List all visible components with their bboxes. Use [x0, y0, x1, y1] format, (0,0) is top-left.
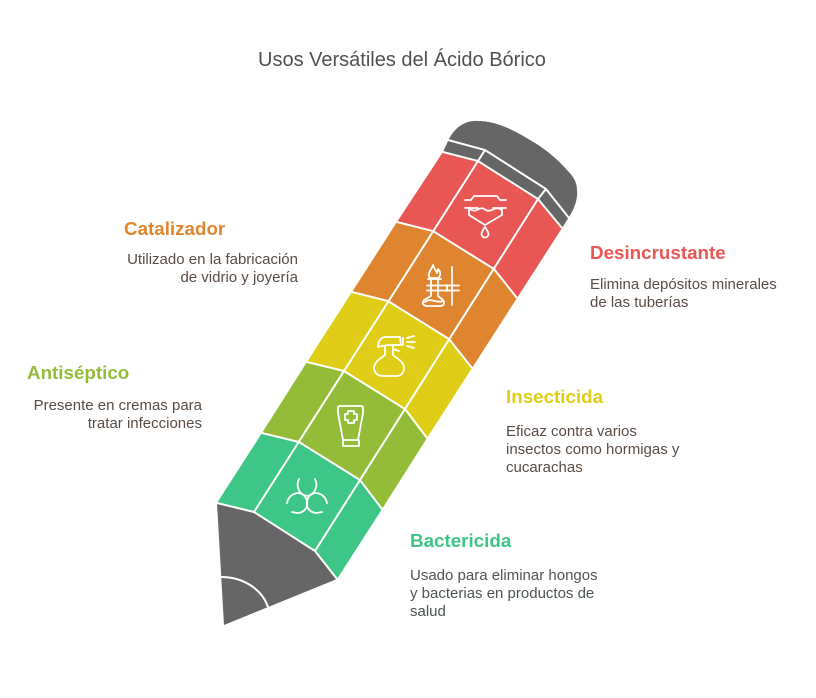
- description: bactericida: y bacterias en productos de: [410, 585, 594, 602]
- icon: biohazard: [287, 479, 327, 513]
- pencil tip: [217, 503, 337, 625]
- text block: bactericida: [410, 530, 598, 620]
- description: bactericida: [410, 567, 598, 620]
- description: insecticida: insectos como hormigas y: [506, 441, 679, 458]
- description: desincrustante: [590, 276, 777, 311]
- text block: insecticida: [506, 386, 680, 476]
- description: insecticida: Eficaz contra varios: [506, 423, 637, 440]
- title: Usos Versátiles del Ácido Bórico: [258, 49, 546, 71]
- segment dividers: [217, 152, 562, 579]
- pencil eraser: [443, 121, 577, 228]
- icon: flask and burner: [423, 265, 459, 306]
- description: antiséptico: tratar infecciones: [88, 415, 202, 432]
- heading: antiséptico: Antiséptico: [27, 362, 129, 383]
- segment: desincrustante: [397, 152, 562, 298]
- icon: spray bottle: [374, 336, 415, 376]
- description: insecticida: cucarachas: [506, 459, 583, 476]
- segment: antiséptico: [262, 362, 427, 509]
- description: catalizador: Utilizado en la fabricación: [127, 251, 298, 268]
- text block: antiséptico: [27, 362, 202, 432]
- segment: bactericida: [217, 433, 382, 579]
- icon: pipe with drop: [465, 196, 506, 238]
- heading: catalizador: Catalizador: [124, 218, 225, 239]
- description: bactericida: Usado para eliminar hongos: [410, 567, 598, 584]
- description: catalizador: [127, 251, 298, 286]
- description: desincrustante: de las tuberías: [590, 294, 688, 311]
- segment: insecticida: [307, 292, 472, 438]
- heading: insecticida: Insecticida: [506, 386, 603, 407]
- segment: catalizador: [352, 222, 517, 368]
- description: bactericida: salud: [410, 603, 446, 620]
- text block: desincrustante: [590, 242, 777, 311]
- description: insecticida: [506, 423, 680, 476]
- description: antiséptico: [34, 397, 202, 432]
- description: catalizador: de vidrio y joyería: [180, 269, 298, 286]
- text block: catalizador: [124, 218, 298, 286]
- heading: bactericida: Bactericida: [410, 530, 511, 551]
- description: antiséptico: Presente en cremas para: [34, 397, 202, 414]
- heading: desincrustante: Desincrustante: [590, 242, 726, 263]
- description: desincrustante: Elimina depósitos minerales: [590, 276, 777, 293]
- icon: cream tube: [338, 406, 363, 446]
